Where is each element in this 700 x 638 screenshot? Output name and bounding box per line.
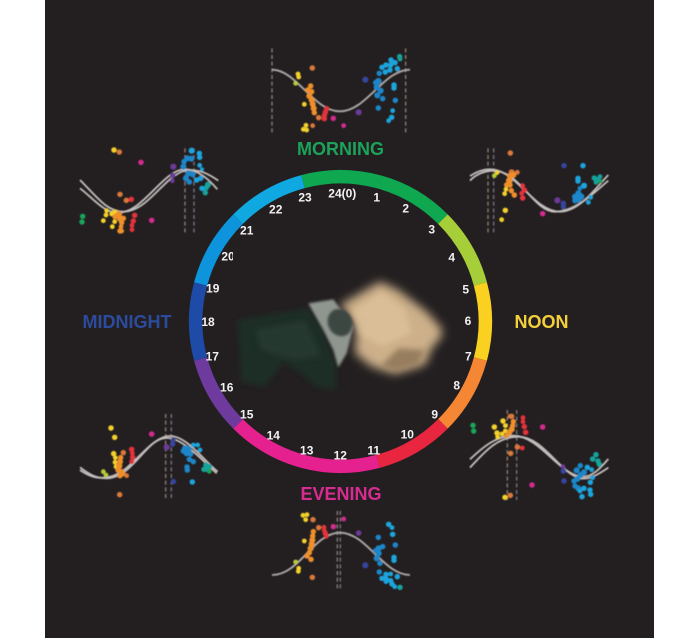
hour labels: 8	[453, 378, 460, 392]
plot: evening	[272, 511, 410, 590]
heading: midnight: MIDNIGHT	[82, 312, 172, 332]
clock ring	[196, 177, 485, 466]
hour labels: 21	[240, 224, 254, 238]
plot: midnight lower left	[80, 414, 218, 501]
hour labels: 23	[298, 190, 312, 204]
hour labels: 7	[465, 350, 472, 364]
hour labels: 6	[465, 314, 472, 328]
plot: noon upper right	[470, 148, 608, 234]
hour labels: 18	[201, 315, 215, 329]
photo: wrist with watch	[238, 282, 442, 390]
hour labels: 22	[269, 202, 283, 216]
hour labels: 19	[206, 281, 220, 295]
hour labels	[201, 186, 472, 462]
hour labels: 12	[334, 448, 347, 462]
hour labels: 20	[221, 250, 235, 264]
hand	[340, 282, 442, 374]
hour labels: 24(0)	[328, 186, 356, 200]
hour labels: 15	[240, 408, 254, 422]
heading: evening: EVENING	[300, 484, 382, 504]
hour labels: 13	[300, 444, 314, 458]
heading: morning: MORNING	[297, 139, 384, 159]
hour labels: 1	[373, 190, 380, 204]
hour labels: 16	[220, 380, 234, 394]
plot: morning	[272, 48, 410, 134]
hour labels: 3	[428, 222, 435, 236]
watch	[308, 299, 353, 367]
hour labels: 2	[402, 201, 409, 215]
hour labels: 11	[367, 443, 380, 457]
sleeve	[238, 308, 336, 390]
plot: noon lower right	[470, 410, 608, 500]
hour labels: 9	[431, 408, 438, 422]
hour labels: 17	[206, 350, 219, 364]
hour labels: 5	[462, 282, 469, 296]
hour labels: 4	[448, 250, 455, 264]
plot: midnight upper left	[80, 148, 218, 234]
hour labels: 14	[267, 429, 280, 443]
heading: noon: NOON	[514, 312, 568, 332]
hour labels: 10	[401, 427, 414, 441]
